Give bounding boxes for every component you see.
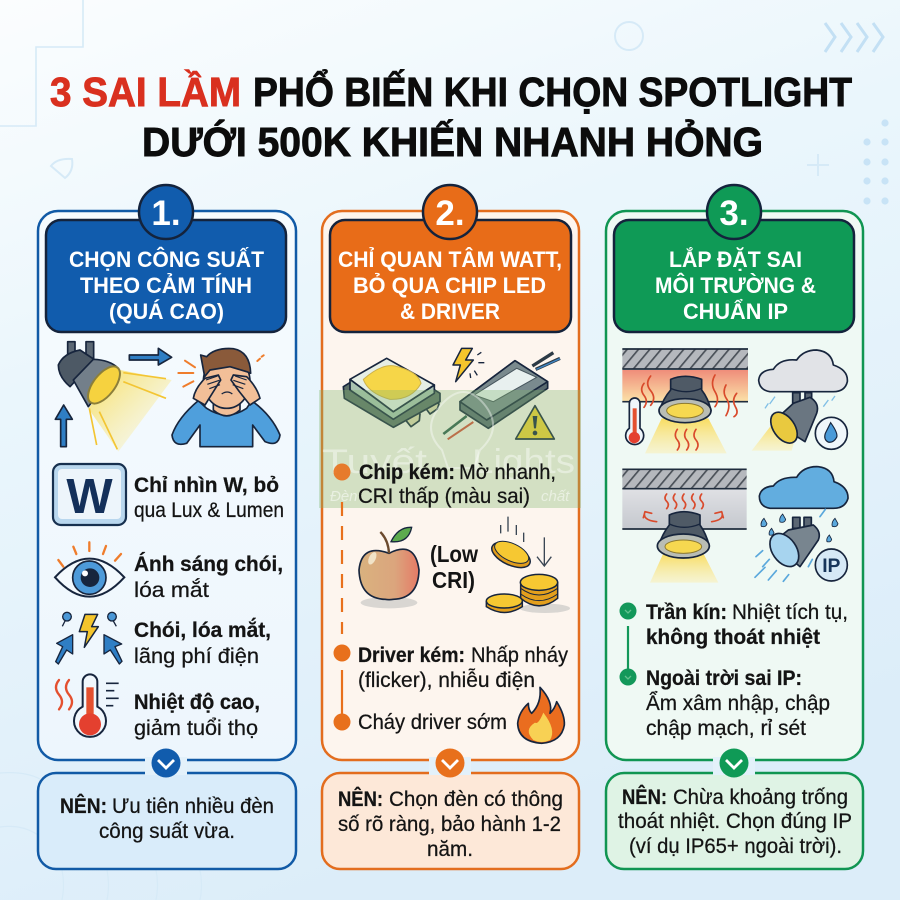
header: mistake 2: & DRIVER <box>400 299 500 324</box>
number badge 1 <box>139 185 193 239</box>
panel: advice 2: số rõ ràng, bảo hành 1-2 <box>338 813 561 836</box>
illustration: spotlight and glare <box>55 342 280 452</box>
watermark: Tuyết <box>322 443 428 481</box>
panel: advice 3: thoát nhiệt. Chọn đúng IP <box>618 810 852 833</box>
text: only watching W <box>134 474 284 522</box>
chevron connector 3 <box>713 748 755 778</box>
text: low CRI: (Low <box>430 541 478 567</box>
watermark: Lights <box>472 443 575 481</box>
header: mistake 3: CHUẨN IP <box>683 299 788 324</box>
illustration: rain and IP rating: IP <box>822 556 841 577</box>
text: glare: lóa mắt <box>134 579 209 602</box>
text: weak driver: Driver kém: <box>358 644 465 667</box>
chevron connector 1 <box>145 748 187 778</box>
panel: mistake 2 <box>319 185 581 760</box>
header: mistake 1: CHỌN CÔNG SUẤT <box>69 247 265 272</box>
illustration: outdoor rain spotlight <box>752 350 847 451</box>
illustration: closed ceiling heat <box>622 349 748 453</box>
icon: thermometer <box>56 674 119 737</box>
text: wrong IP outdoors <box>646 667 830 740</box>
text: wrong IP outdoors: Ẩm xâm nhập, chập <box>646 692 830 715</box>
text: weak chip: Mờ nhanh, <box>459 461 556 484</box>
panel: advice 2: NÊN: <box>338 787 383 811</box>
icon: flame <box>518 687 564 743</box>
text: burnt driver: Cháy driver sớm <box>358 711 507 734</box>
text: glare <box>134 553 283 602</box>
header: mistake 2 <box>330 220 571 332</box>
text: wasted power <box>134 618 271 668</box>
panel: advice 3: Chừa khoảng trống <box>673 786 848 809</box>
icon: W key <box>53 464 126 525</box>
text: only watching W: Chỉ nhìn W, bỏ <box>134 474 279 497</box>
title: PHỔ BIẾN KHI CHỌN SPOTLIGHT <box>253 68 852 115</box>
text: weak chip: Chip kém: <box>359 461 455 484</box>
title: DƯỚI 500K KHIẾN NHANH HỎNG <box>142 119 763 165</box>
icon: eye <box>55 542 124 597</box>
panel: advice 2: Chọn đèn có thông <box>389 788 563 811</box>
watermark <box>319 390 581 508</box>
panel: advice 2: năm. <box>427 838 473 861</box>
header: mistake 3 <box>614 220 854 332</box>
panel: advice 3 <box>606 773 863 869</box>
text: weak driver: (flicker), nhiễu điện <box>358 669 535 692</box>
text: weak driver: Nhấp nháy <box>471 644 568 667</box>
text: heat: giảm tuổi thọ <box>134 717 258 740</box>
header: mistake 1: THEO CẢM TÍNH <box>80 273 252 298</box>
header: mistake 1 <box>46 220 286 332</box>
title <box>50 68 852 165</box>
watermark: chất <box>541 488 570 505</box>
text: low CRI <box>430 541 478 593</box>
text: weak driver <box>358 644 568 692</box>
text: wrong IP outdoors: Ngoài trời sai IP: <box>646 667 802 690</box>
number badge 3: 3. <box>719 194 749 233</box>
icon: W key: W <box>66 470 113 524</box>
text: closed ceiling <box>646 601 848 649</box>
text: weak chip: CRI thấp (màu sai) <box>358 485 530 508</box>
chevron connector 2 <box>429 748 471 778</box>
panel: advice 1 <box>38 773 296 869</box>
text: only watching W: qua Lux & Lumen <box>134 499 284 522</box>
text: low CRI: CRI) <box>432 567 475 593</box>
text: wasted power: lãng phí điện <box>134 645 259 668</box>
number badge 2 <box>423 185 477 239</box>
text: closed ceiling: Nhiệt tích tụ, <box>732 601 848 624</box>
timeline: mistake 2 <box>334 464 350 730</box>
illustration: ventilated ceiling <box>622 469 747 583</box>
title: 3 SAI LẦM <box>50 69 241 115</box>
watermark: Đèn <box>330 488 358 505</box>
panel: advice 2 <box>322 773 579 869</box>
panel: advice 1: NÊN: <box>60 794 107 818</box>
panel: mistake 1 <box>38 185 296 760</box>
text: glare: Ánh sáng chói, <box>134 553 283 576</box>
panel: advice 3: NÊN: <box>622 785 667 809</box>
panel: advice 1: công suất vừa. <box>99 820 235 843</box>
timeline: mistake 3 <box>620 602 636 686</box>
header: mistake 3: LẮP ĐẶT SAI <box>669 247 802 272</box>
icon: peach <box>359 527 419 608</box>
header: mistake 3: MÔI TRƯỜNG & <box>655 273 816 298</box>
icon: falling coins <box>486 517 570 613</box>
header: mistake 2: CHỈ QUAN TÂM WATT, <box>338 247 562 272</box>
text: closed ceiling: không thoát nhiệt <box>646 626 820 649</box>
header: mistake 2: BỎ QUA CHIP LED <box>353 273 546 298</box>
number badge 1: 1. <box>151 194 181 233</box>
header: mistake 1: (QUÁ CAO) <box>109 299 224 324</box>
text: weak chip <box>358 461 556 508</box>
icon: lightning and arrows <box>56 612 122 664</box>
panel: mistake 3 <box>606 185 863 760</box>
text: heat: Nhiệt độ cao, <box>134 691 260 714</box>
text: wrong IP outdoors: chập mạch, rỉ sét <box>646 717 806 740</box>
panel: advice 1: Ưu tiên nhiều đèn <box>112 795 274 818</box>
text: heat <box>134 691 260 740</box>
number badge 3 <box>707 185 761 239</box>
illustration: LED chip and driver <box>343 348 560 439</box>
panel: advice 3: (ví dụ IP65+ ngoài trời). <box>629 835 842 858</box>
illustration: rain and IP rating <box>755 467 848 581</box>
text: closed ceiling: Trần kín: <box>646 601 727 624</box>
number badge 2: 2. <box>435 194 465 233</box>
text: wasted power: Chói, lóa mắt, <box>134 618 271 642</box>
